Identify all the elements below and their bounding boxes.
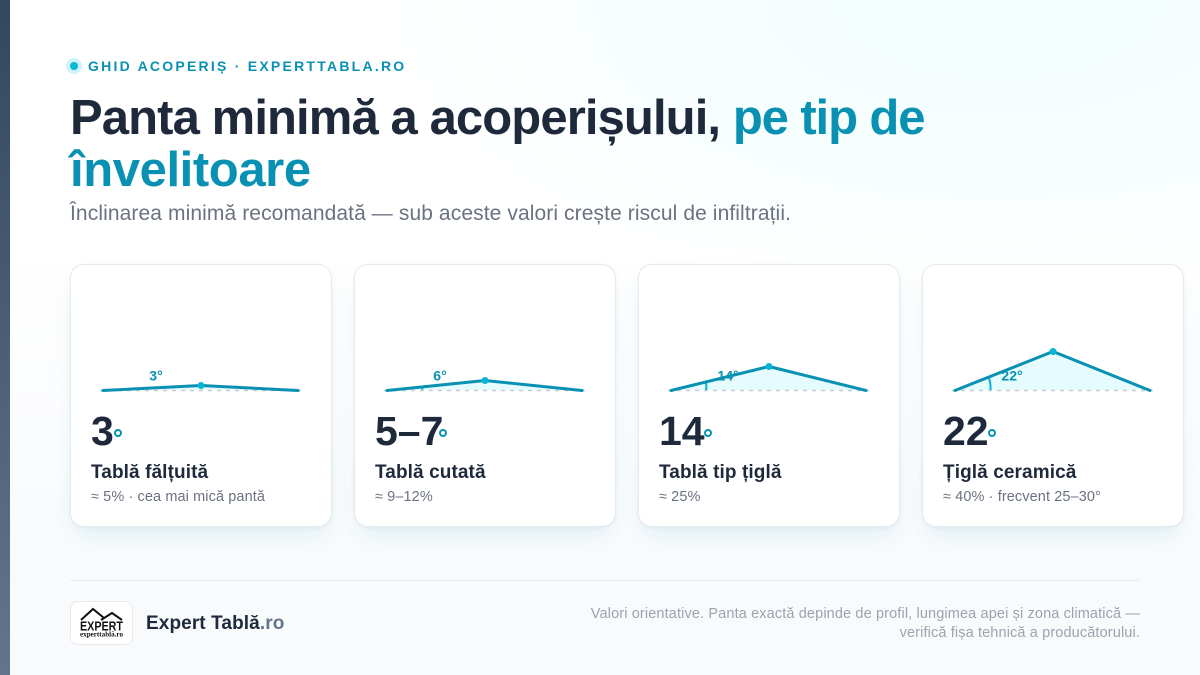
footnote — [590, 606, 1140, 641]
panel: card Tablă fălțuită — [70, 264, 332, 527]
left accent bar — [0, 0, 10, 675]
value: 22 — [943, 408, 989, 454]
note: ≈ 25% — [659, 489, 701, 505]
panel: card Tablă cutată — [354, 264, 616, 527]
roof diagram 6 degrees — [384, 368, 585, 392]
roof diagram 22 degrees — [952, 348, 1153, 392]
roof diagram 3 degrees — [100, 368, 301, 392]
note: ≈ 5% · cea mai mică pantă — [91, 489, 265, 505]
degree mark — [988, 429, 996, 437]
note: ≈ 9–12% — [375, 489, 433, 505]
panel: card Țiglă ceramică — [922, 264, 1184, 527]
roof diagram 3 degrees: 3° — [149, 368, 163, 384]
value: 5–7 — [375, 408, 443, 454]
roof diagram 22 degrees: 22° — [1001, 368, 1023, 384]
material name: Tablă fălțuită — [91, 462, 208, 483]
footnote: Valori orientative. Panta exactă depinde de profil, lungimea apei și zona climatică — — [591, 606, 1140, 622]
value: 3 — [91, 408, 114, 454]
roof diagram 14 degrees: 14° — [717, 368, 739, 384]
title — [68, 91, 924, 197]
icon: house logo — [80, 608, 124, 638]
brand name: Expert Tablă.ro — [146, 613, 284, 634]
note: ≈ 40% · frecvent 25–30° — [943, 489, 1101, 505]
panel: card Tablă tip țiglă — [638, 264, 900, 527]
title: Panta minimă a acoperișului, pe tip de — [70, 91, 924, 145]
eyebrow text: GHID ACOPERIȘ · EXPERTTABLA.RO — [88, 58, 406, 74]
title: învelitoare — [70, 143, 311, 197]
eyebrow label — [66, 58, 406, 74]
roof diagram 14 degrees — [668, 363, 869, 392]
roof diagram 6 degrees: 6° — [433, 368, 447, 384]
material name: Țiglă ceramică — [943, 462, 1076, 483]
icon: status dot — [66, 58, 82, 74]
icon: house logo: EXPERT — [80, 620, 123, 634]
degree mark — [704, 429, 712, 437]
degree mark — [114, 429, 122, 437]
icon: house logo: experttablă.ro — [80, 632, 124, 638]
material name: Tablă cutată — [375, 462, 486, 483]
logo badge — [70, 601, 133, 645]
footnote: verifică fișa tehnică a producătorului. — [900, 625, 1140, 641]
degree mark — [439, 429, 447, 437]
material name: Tablă tip țiglă — [659, 462, 782, 483]
value: 14 — [659, 408, 705, 454]
subtitle: Înclinarea minimă recomandată — sub aceste valori crește riscul de infiltrații. — [70, 202, 791, 225]
